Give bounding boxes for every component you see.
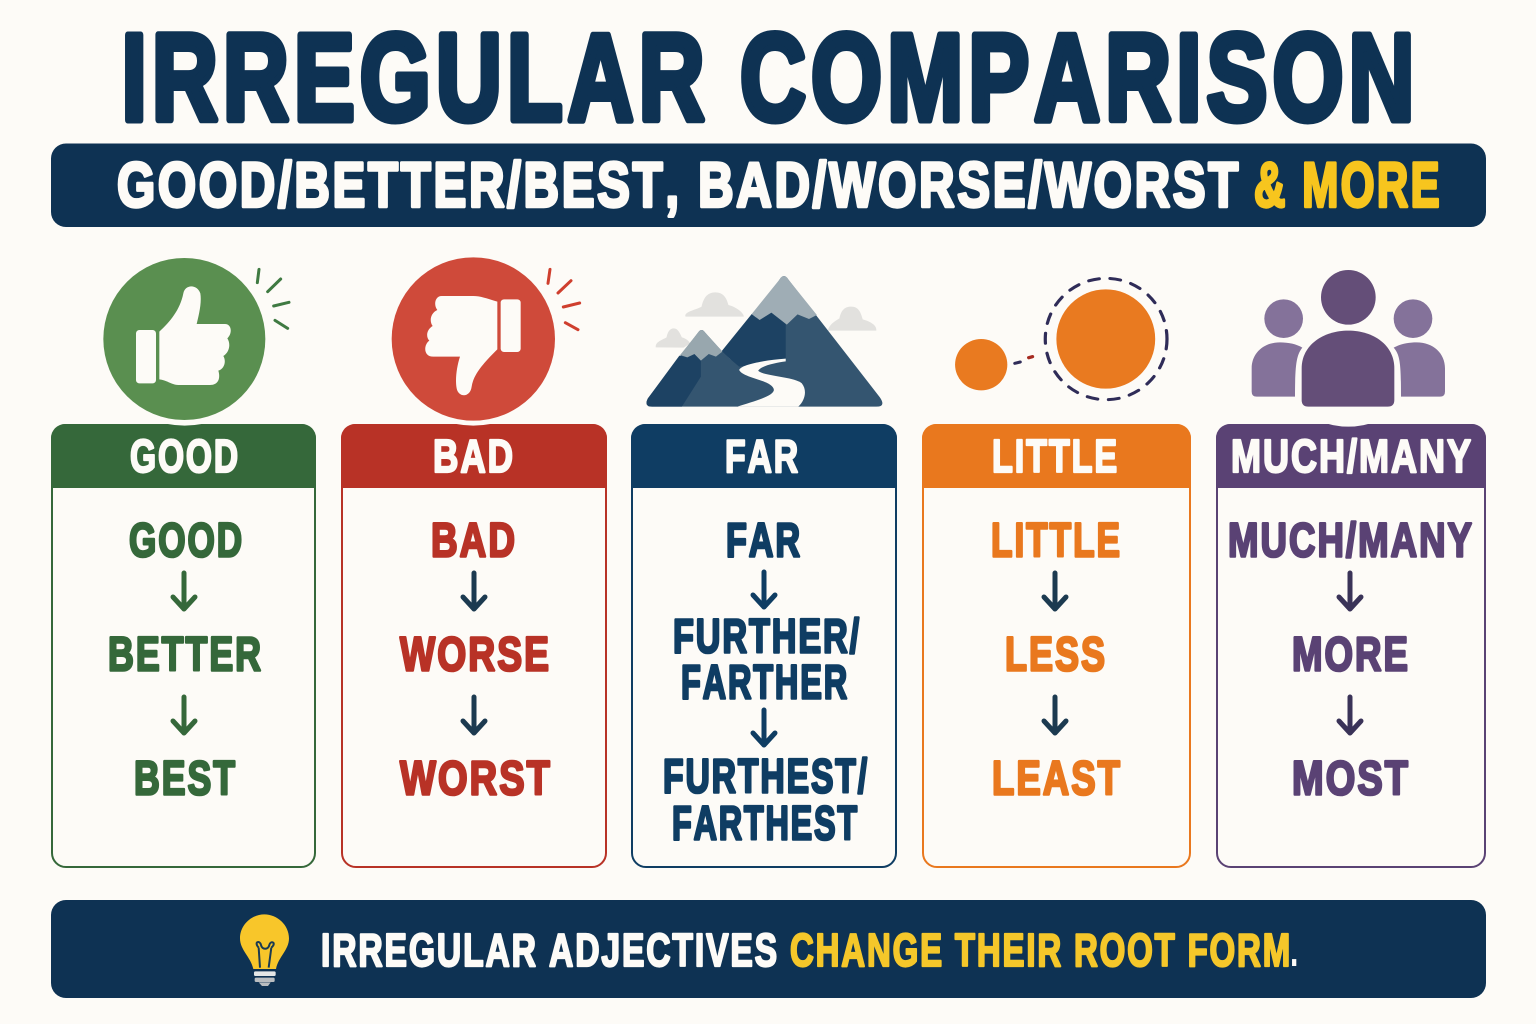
arrow — [463, 697, 485, 733]
arrow — [753, 572, 775, 607]
word: bad: BAD — [431, 515, 517, 568]
arrow — [1044, 697, 1066, 733]
panel: far — [631, 424, 897, 867]
word: less: LESS — [1005, 629, 1107, 682]
footer text: yellow part: CHANGE THEIR ROOT FORM — [790, 924, 1292, 976]
heading: little: LITTLE — [992, 430, 1119, 482]
arrow — [463, 573, 485, 609]
subtitle text: white part: GOOD/BETTER/BEST, BAD/WORSE/WORST — [117, 150, 1241, 220]
subtitle banner — [51, 144, 1486, 227]
icon: light bulb — [240, 914, 289, 986]
icon: mountains — [646, 276, 882, 407]
arrow — [1339, 697, 1361, 733]
word: little: LITTLE — [991, 515, 1122, 568]
word: most: MOST — [1292, 753, 1410, 806]
heading: far: FAR — [725, 430, 800, 482]
footer text: white part: IRREGULAR ADJECTIVES — [321, 924, 779, 976]
arrow — [173, 697, 195, 733]
word: farthest: FARTHEST — [672, 797, 859, 850]
footer banner — [51, 900, 1486, 998]
word: better: BETTER — [108, 629, 263, 682]
word: furthest: FURTHEST/ — [663, 751, 869, 804]
heading: much/many: MUCH/MANY — [1231, 430, 1473, 482]
panel: bad — [341, 424, 607, 867]
arrow — [1044, 573, 1066, 609]
arrow — [753, 710, 775, 745]
arrow — [1339, 573, 1361, 609]
panel: good — [51, 424, 316, 867]
word: least: LEAST — [992, 753, 1122, 806]
word: further: FURTHER/ — [673, 610, 861, 663]
icon: small and big circles — [955, 278, 1167, 400]
word: far: FAR — [726, 515, 802, 568]
word: more: MORE — [1292, 629, 1410, 682]
word: good: GOOD — [129, 515, 244, 568]
icon: group of people — [1252, 270, 1445, 427]
arrow — [173, 573, 195, 609]
panel: much/many — [1216, 424, 1486, 867]
word: worst: WORST — [400, 753, 552, 806]
word: best: BEST — [134, 753, 237, 806]
panel: little — [922, 424, 1191, 867]
icon: thumbs up — [99, 254, 289, 426]
icon: thumbs down — [387, 254, 580, 426]
word: farther: FARTHER — [681, 657, 849, 710]
heading: bad: BAD — [433, 430, 515, 482]
heading: good: GOOD — [130, 430, 240, 482]
footer text: period: . — [1290, 924, 1300, 976]
word: worse: WORSE — [400, 629, 551, 682]
subtitle text: yellow part: & MORE — [1254, 150, 1442, 220]
